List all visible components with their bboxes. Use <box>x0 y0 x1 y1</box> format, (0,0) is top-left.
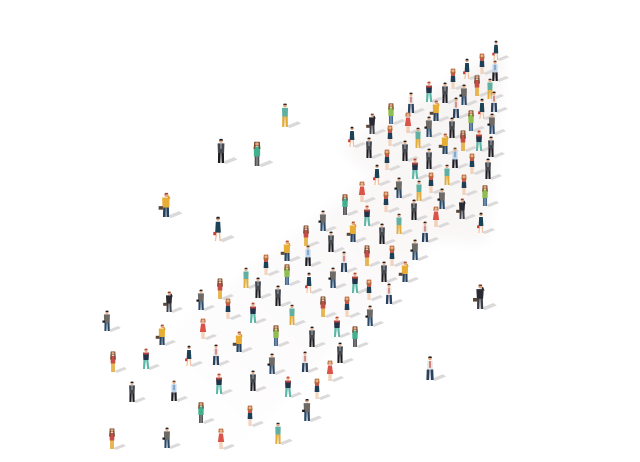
person <box>243 268 260 289</box>
person <box>424 117 443 138</box>
person <box>309 327 326 348</box>
person <box>379 224 396 245</box>
person <box>381 262 398 283</box>
person <box>412 159 429 180</box>
person <box>428 173 445 194</box>
person <box>410 240 429 261</box>
person <box>365 306 384 327</box>
person <box>487 114 506 135</box>
arrow ground shape <box>100 50 503 462</box>
person <box>352 273 369 294</box>
person <box>387 126 404 147</box>
person: scattered, yellow jacket <box>159 193 183 218</box>
person <box>478 99 496 120</box>
person <box>341 252 358 273</box>
person <box>388 103 405 125</box>
person <box>389 246 406 267</box>
person <box>143 349 160 370</box>
person <box>477 213 495 234</box>
person <box>129 382 146 403</box>
person: scattered, navy dress <box>213 217 235 242</box>
person <box>366 280 383 301</box>
person <box>162 428 181 449</box>
person <box>439 134 459 155</box>
person <box>463 59 481 80</box>
person <box>479 54 496 75</box>
person <box>273 325 290 347</box>
person <box>110 352 127 373</box>
person <box>102 311 121 332</box>
person <box>411 200 428 221</box>
person <box>163 292 183 313</box>
person <box>405 113 422 134</box>
person <box>383 192 400 213</box>
person <box>491 92 508 113</box>
person <box>386 284 403 305</box>
person <box>216 374 233 395</box>
person <box>402 141 419 162</box>
crowd of people <box>102 41 509 450</box>
person <box>453 98 470 119</box>
person: scattered, teal shirt <box>282 104 301 128</box>
person <box>426 82 443 103</box>
person <box>416 181 433 202</box>
person <box>289 305 306 326</box>
person <box>461 175 478 196</box>
person <box>314 379 331 400</box>
person <box>459 85 478 106</box>
person <box>263 255 280 276</box>
person <box>285 377 302 398</box>
person <box>415 128 432 149</box>
person <box>218 429 235 450</box>
person <box>449 118 466 139</box>
person <box>430 101 450 122</box>
person <box>492 61 509 82</box>
person <box>469 154 486 175</box>
person <box>327 361 344 382</box>
person: scattered, dark suit <box>218 139 238 164</box>
person <box>347 222 367 243</box>
person <box>267 354 286 375</box>
person <box>281 241 301 262</box>
person <box>344 297 361 318</box>
person <box>352 326 369 348</box>
person <box>337 343 354 364</box>
person <box>359 182 376 203</box>
person <box>396 214 413 235</box>
person <box>394 178 413 199</box>
person <box>474 76 491 97</box>
person <box>302 399 322 422</box>
person <box>456 199 476 220</box>
person <box>284 264 301 286</box>
person <box>452 148 469 169</box>
person <box>171 381 188 402</box>
person <box>213 345 230 366</box>
person <box>348 127 366 148</box>
person <box>328 232 345 253</box>
person <box>373 165 391 186</box>
person <box>275 423 293 445</box>
person <box>318 211 337 232</box>
person <box>460 130 477 152</box>
person <box>426 149 443 170</box>
person <box>399 262 419 283</box>
person <box>334 317 351 338</box>
person <box>342 194 359 216</box>
person <box>196 290 215 311</box>
person <box>109 428 126 450</box>
person <box>450 69 467 90</box>
person <box>305 246 322 267</box>
person <box>422 222 439 243</box>
person <box>408 93 425 114</box>
person <box>482 185 499 207</box>
person <box>328 268 347 289</box>
person <box>255 278 272 299</box>
person <box>384 150 401 171</box>
person <box>364 206 381 227</box>
person: arrow tip <box>492 41 509 61</box>
person <box>198 402 215 424</box>
person <box>250 303 267 324</box>
person <box>468 110 485 132</box>
person <box>487 79 504 100</box>
person <box>275 286 292 307</box>
person <box>476 131 493 152</box>
person: scattered, green top <box>254 142 274 167</box>
person <box>366 114 386 135</box>
person <box>185 346 203 367</box>
person <box>437 189 456 210</box>
person <box>366 138 383 159</box>
person <box>305 273 323 294</box>
person <box>442 83 459 104</box>
person <box>485 159 502 180</box>
person <box>217 278 234 300</box>
person <box>303 226 320 247</box>
person: scattered, white shirt <box>426 356 446 381</box>
person <box>320 296 337 318</box>
person <box>247 406 264 427</box>
person <box>488 137 505 158</box>
person <box>250 371 267 392</box>
person <box>433 207 450 228</box>
person <box>200 319 217 340</box>
person <box>302 352 319 373</box>
person <box>444 165 461 186</box>
person: scattered, dark jacket with briefcase <box>473 285 497 310</box>
person <box>225 299 242 320</box>
person <box>233 332 253 353</box>
person <box>364 246 381 267</box>
person <box>156 325 176 346</box>
